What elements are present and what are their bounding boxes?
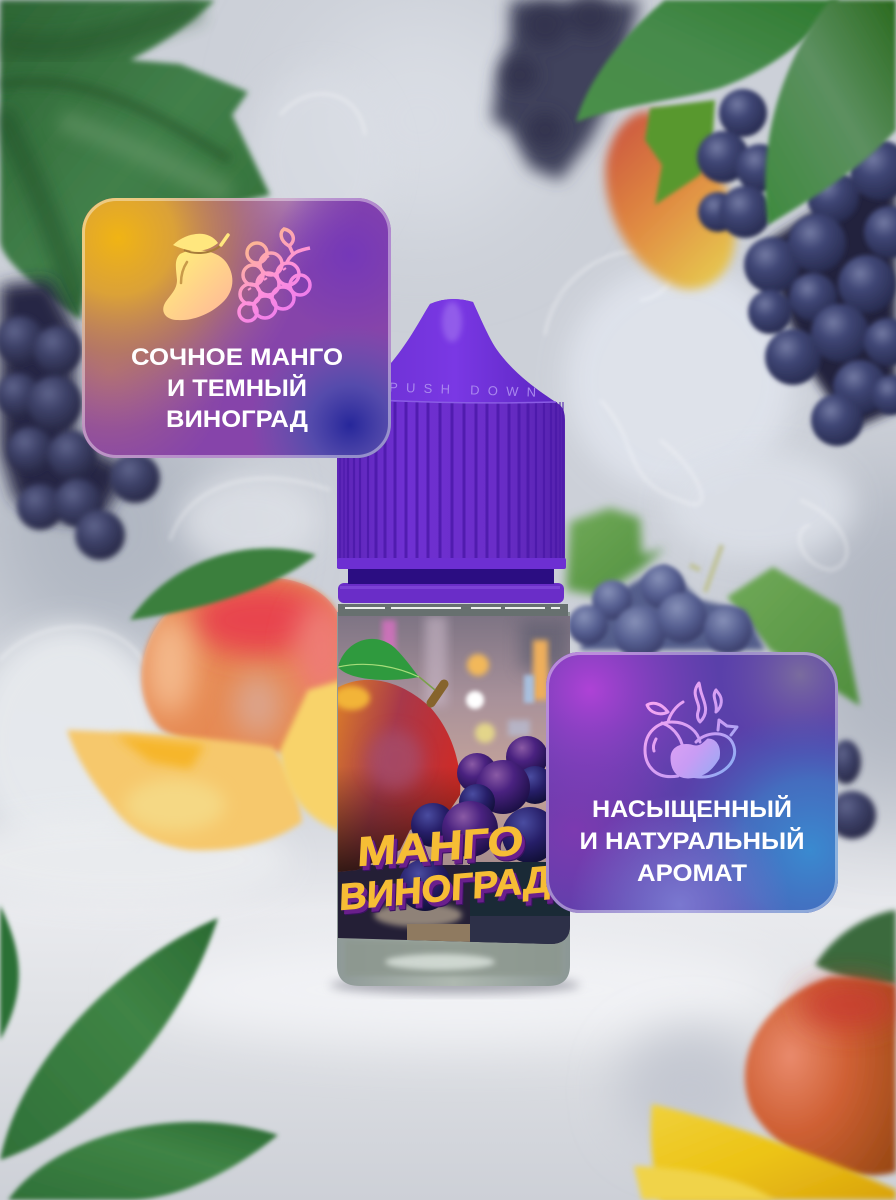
card text: И НАТУРАЛЬНЫЙ <box>580 827 804 855</box>
top-right grape cluster <box>697 89 896 446</box>
card text: И ТЕМНЫЙ <box>167 374 307 402</box>
top-right mango <box>605 100 735 289</box>
label grapes <box>506 736 546 770</box>
bottle shadow <box>330 976 580 994</box>
bottle collar <box>338 583 564 603</box>
card: juicy mango and dark grape <box>82 198 391 458</box>
glass body <box>337 612 570 986</box>
mid-right grapes with leaves <box>566 508 876 839</box>
card text: СОЧНОЕ МАНГО <box>131 344 343 371</box>
bottom-left leaves <box>0 905 278 1200</box>
label dark base <box>338 865 570 945</box>
card: rich natural aroma <box>546 652 838 913</box>
label title: ВИНОГРАД <box>339 857 551 918</box>
icon: fruit and aroma <box>645 683 737 777</box>
cap <box>337 299 565 568</box>
bottom-right mango <box>634 910 896 1200</box>
product label <box>334 616 570 946</box>
cap ribs <box>340 402 563 560</box>
label title <box>341 826 554 916</box>
label leaf <box>338 639 419 680</box>
card text: ВИНОГРАД <box>166 406 308 433</box>
bottle: PUSH DOWN <box>389 380 536 400</box>
card text <box>580 795 804 887</box>
card text: НАСЫЩЕННЫЙ <box>592 795 792 823</box>
top-right leaves <box>576 0 896 225</box>
top-left leaves <box>0 0 270 320</box>
left mango <box>67 548 350 850</box>
top-centre blurred grapes <box>492 0 640 180</box>
icon: grapes <box>239 229 310 321</box>
card text <box>131 344 343 433</box>
bottle <box>330 299 580 994</box>
icon: mango <box>163 234 232 320</box>
card text: АРОМАТ <box>637 860 747 887</box>
label mango <box>334 680 460 872</box>
small grapes right of card <box>828 740 876 839</box>
smoke <box>0 70 855 905</box>
left grape cluster <box>0 280 160 560</box>
label title: МАНГО <box>357 817 525 875</box>
